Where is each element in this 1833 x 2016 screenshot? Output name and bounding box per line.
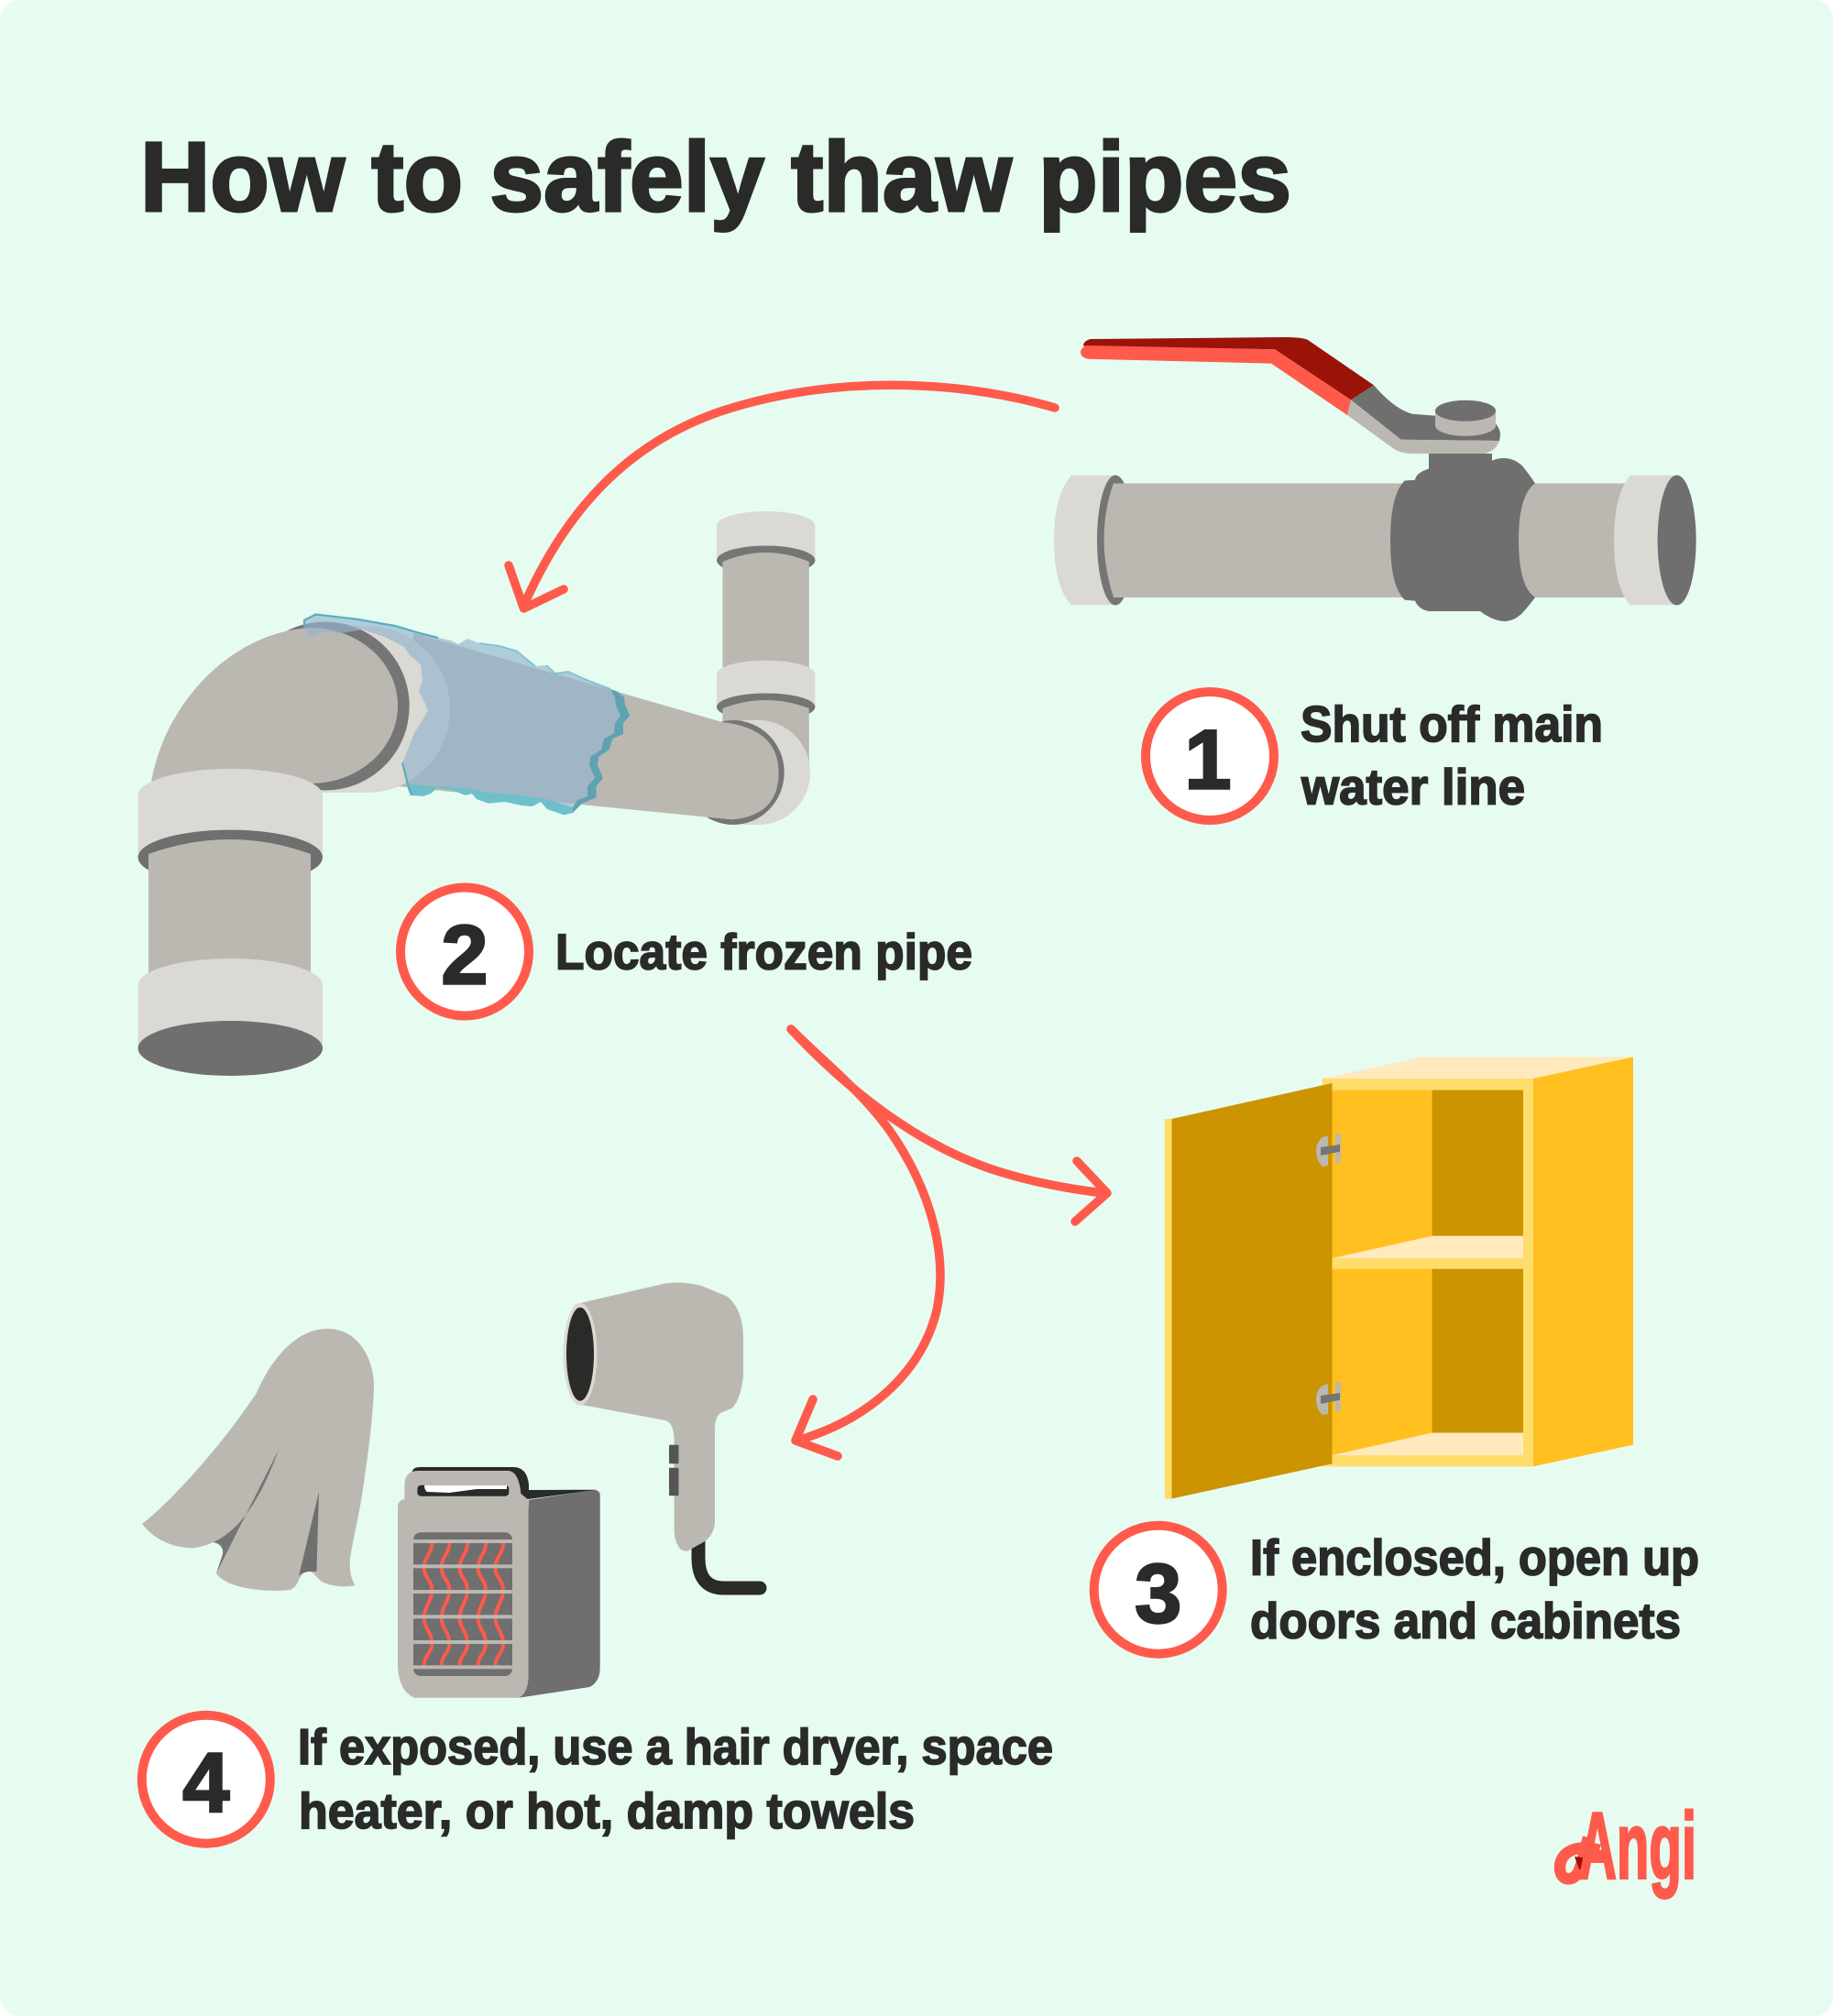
step 1 label (1301, 696, 1603, 816)
arrow: to cabinet (791, 1029, 1107, 1222)
logo: Angi: Angi (1578, 1792, 1696, 1898)
tapered pipe (395, 633, 779, 819)
elbow (149, 628, 398, 806)
illustration: space heater (398, 1467, 600, 1698)
cabinet top (1323, 1057, 1633, 1079)
lower vertical pipe (138, 769, 323, 1076)
step 4 label (298, 1718, 1053, 1839)
step 1 badge (1146, 692, 1274, 820)
illustration: hair dryer (563, 1283, 760, 1588)
illustration: towel (142, 1329, 374, 1591)
step 2 badge (401, 887, 529, 1015)
heater front (398, 1471, 529, 1698)
lower compartment (1333, 1269, 1523, 1455)
valve right pipe (1519, 484, 1641, 597)
upper compartment (1333, 1090, 1523, 1258)
step 4 badge: 4 (182, 1737, 229, 1830)
illustration: shut-off valve (1054, 337, 1696, 621)
dryer switch (669, 1445, 678, 1496)
heater handle hole (417, 1485, 509, 1496)
heater back edge (412, 1467, 597, 1500)
step 4 label: If exposed, use a hair dryer, space (298, 1718, 1053, 1775)
heating coils (424, 1543, 503, 1665)
step 2 badge: 2 (441, 909, 488, 1003)
step 1 label: Shut off main (1301, 696, 1603, 752)
valve handle (1081, 337, 1500, 454)
upper hinge (1316, 1134, 1341, 1167)
valve knob (1435, 400, 1496, 436)
step 4 label: heater, or hot, damp towels (299, 1782, 915, 1839)
dryer cord (698, 1539, 760, 1588)
dryer nozzle (563, 1303, 598, 1406)
elbow collar (312, 626, 450, 793)
cabinet front frame (1323, 1079, 1533, 1466)
step 1 label: water line (1301, 759, 1525, 816)
arrow: to heat tools (791, 1029, 940, 1456)
illustration: frozen pipe (138, 511, 815, 1076)
step 3 badge (1094, 1526, 1223, 1654)
step 3 badge: 3 (1135, 1547, 1181, 1640)
cabinet door (1165, 1083, 1333, 1499)
step 4 badge (142, 1715, 270, 1844)
heater side (519, 1490, 600, 1698)
step 3 label: doors and cabinets (1250, 1592, 1681, 1649)
arrow: valve to frozen pipe (509, 385, 1055, 608)
step 2 label: Locate frozen pipe (555, 924, 972, 981)
illustration: open cabinet (1165, 1057, 1633, 1499)
dryer body (581, 1283, 743, 1551)
ice on pipe (304, 614, 630, 815)
step 3 label (1250, 1528, 1699, 1649)
upper vertical pipe (717, 511, 815, 779)
step 1 badge: 1 (1184, 713, 1232, 806)
tapered pipe end collar (742, 720, 810, 825)
cabinet side (1533, 1057, 1633, 1466)
logo: Angi (1560, 1792, 1696, 1898)
title: How to safely thaw pipes (140, 121, 1291, 232)
step 3 label: If enclosed, open up (1250, 1528, 1699, 1585)
lower hinge (1316, 1382, 1341, 1415)
heater grill (413, 1532, 512, 1676)
valve main pipe (1054, 476, 1115, 605)
valve body (1390, 454, 1535, 621)
